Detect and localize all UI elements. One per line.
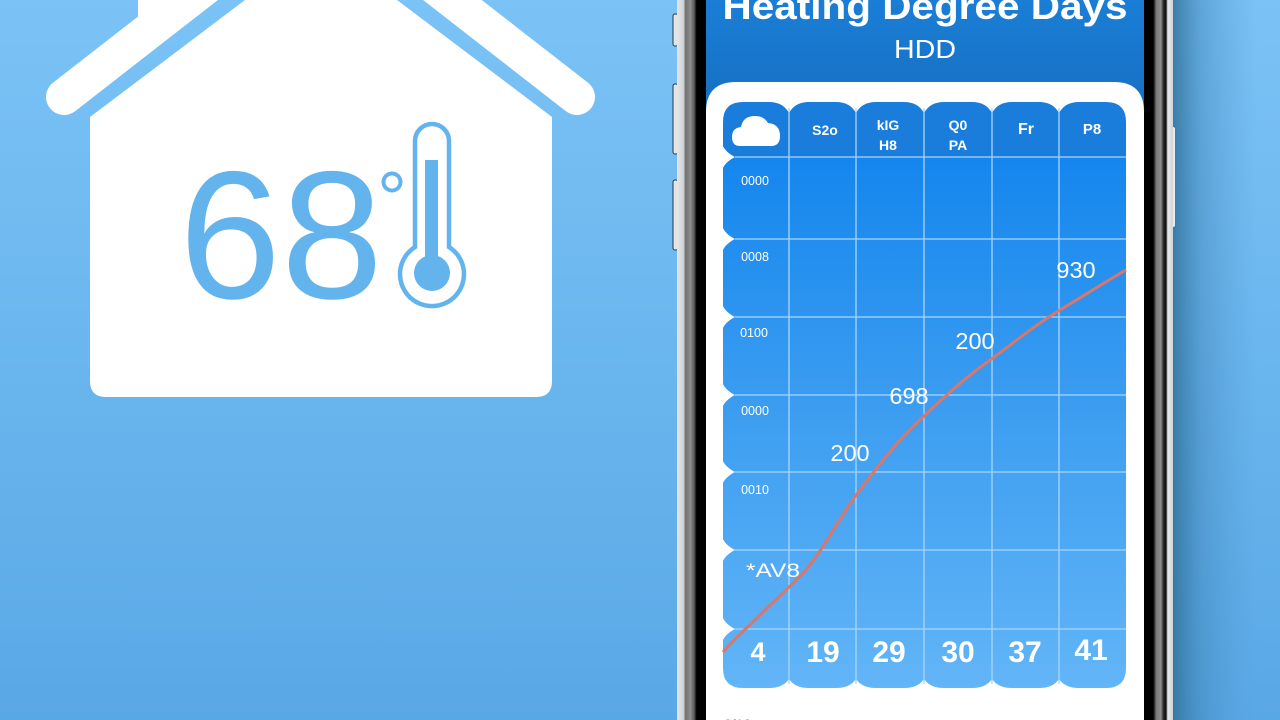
row labels: 0008 (741, 250, 769, 264)
data point labels: 930 (1056, 257, 1096, 283)
screen card (706, 82, 1144, 720)
row labels (740, 174, 769, 497)
row labels: 0100 (740, 326, 768, 340)
degree symbol (384, 174, 400, 190)
bottom row values (750, 634, 1108, 669)
column headers (812, 117, 1101, 153)
house roof right (401, 0, 577, 97)
row labels: 0000 (741, 174, 769, 188)
app subtitle: HDD (894, 34, 956, 64)
line: HDD curve (723, 270, 1126, 652)
column headers: S2o (812, 122, 838, 138)
icon: cloud (732, 116, 780, 146)
first column row notches (722, 144, 735, 642)
row labels: 0000 (741, 404, 769, 418)
table body (723, 157, 1126, 688)
row labels: 0010 (741, 483, 769, 497)
house roof left (64, 0, 240, 97)
column headers: PA (949, 137, 967, 153)
data point labels (830, 257, 1096, 466)
bottom row values: 41 (1074, 634, 1108, 667)
icon: house with temperature (64, 0, 577, 397)
chart table (722, 102, 1126, 688)
screen header (706, 0, 1144, 110)
grid lines (735, 108, 1126, 684)
bottom row values: 30 (941, 636, 975, 669)
phone side buttons (673, 14, 1175, 250)
data point labels: 200 (955, 328, 995, 354)
data point labels: 200 (830, 440, 870, 466)
phone frame right (1144, 0, 1173, 720)
house chimney (138, 0, 215, 50)
phone shadow (1172, 0, 1257, 720)
column headers: Q0 (949, 117, 968, 133)
column headers: H8 (879, 137, 897, 153)
bottom row values: 29 (872, 636, 906, 669)
table header row (723, 102, 1126, 157)
house body (90, 0, 552, 397)
column headers: kIG (877, 117, 899, 133)
column headers: P8 (1083, 121, 1101, 138)
row label AVB: *AV8 (746, 561, 800, 582)
bottom row values: 37 (1008, 636, 1042, 669)
bottom row values: 19 (806, 636, 840, 669)
phone frame left (677, 0, 707, 720)
data point labels: 698 (889, 383, 929, 409)
temperature value: 68 (179, 133, 383, 337)
phone (673, 0, 1175, 720)
icon: thermometer (400, 124, 464, 306)
bottom row values: 4 (750, 637, 766, 667)
column headers: Fr (1018, 121, 1034, 138)
